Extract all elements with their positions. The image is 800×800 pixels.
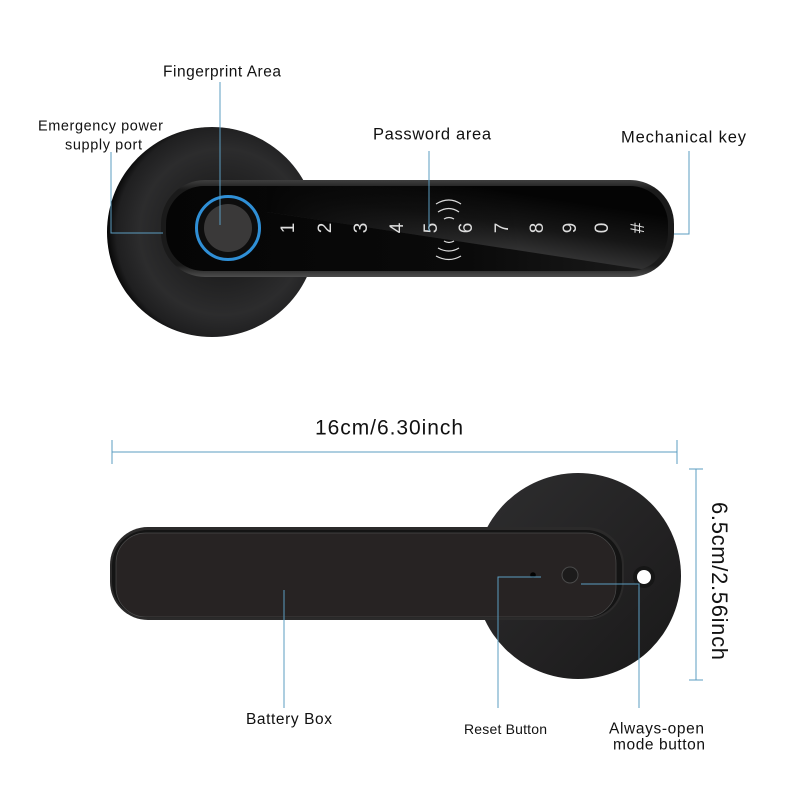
callout: always-open mode button: Always-open [609,720,704,738]
keypad digits: 7 [492,223,513,233]
callout: password area [373,126,492,231]
keypad digits: 9 [560,223,581,233]
icon: fingerprint sensor [196,196,260,260]
callout: emergency power supply port [38,118,163,233]
callout: fingerprint area: Fingerprint Area [163,64,281,80]
callout: always-open mode button: mode button [613,736,705,754]
icon: reset hole [530,572,536,578]
keypad digits: 3 [351,223,372,233]
handle: front keypad lever [161,180,680,277]
handle: rear lever with battery box [110,527,624,620]
keypad digits: 0 [592,223,613,233]
dimension: width: 16cm/6.30inch [315,416,463,440]
keypad digits: 5 [421,223,442,233]
callout: battery box: Battery Box [246,711,332,728]
dimension: height [689,469,732,680]
callout: emergency power supply port: Emergency power [38,118,163,134]
callout: mechanical key [621,128,747,234]
keypad digits: # [628,222,649,233]
callout: battery box [246,590,332,728]
callout: reset button [464,577,547,737]
icon: NFC waves [436,200,461,260]
dimension: width [112,416,677,464]
disc: rear rosette [475,473,681,679]
keypad digits: 8 [527,223,548,233]
keypad digits: 1 [278,223,299,233]
callout: mechanical key: Mechanical key [621,128,747,146]
keypad digits: 4 [387,222,408,233]
callout: emergency power supply port: supply port [65,138,142,154]
disc: front rosette [107,127,317,337]
keypad digits: 2 [315,223,336,233]
icon: always-open button [562,567,578,583]
keypad digits: 6 [456,223,477,233]
callout: reset button: Reset Button [464,721,547,737]
mounting hole [633,566,655,588]
callout: always-open mode button [581,584,705,754]
keypad digits [278,222,649,233]
callout: password area: Password area [373,126,492,144]
back lock view [110,473,681,679]
dimension: height: 6.5cm/2.56inch [707,502,732,660]
front lock view [107,127,680,337]
